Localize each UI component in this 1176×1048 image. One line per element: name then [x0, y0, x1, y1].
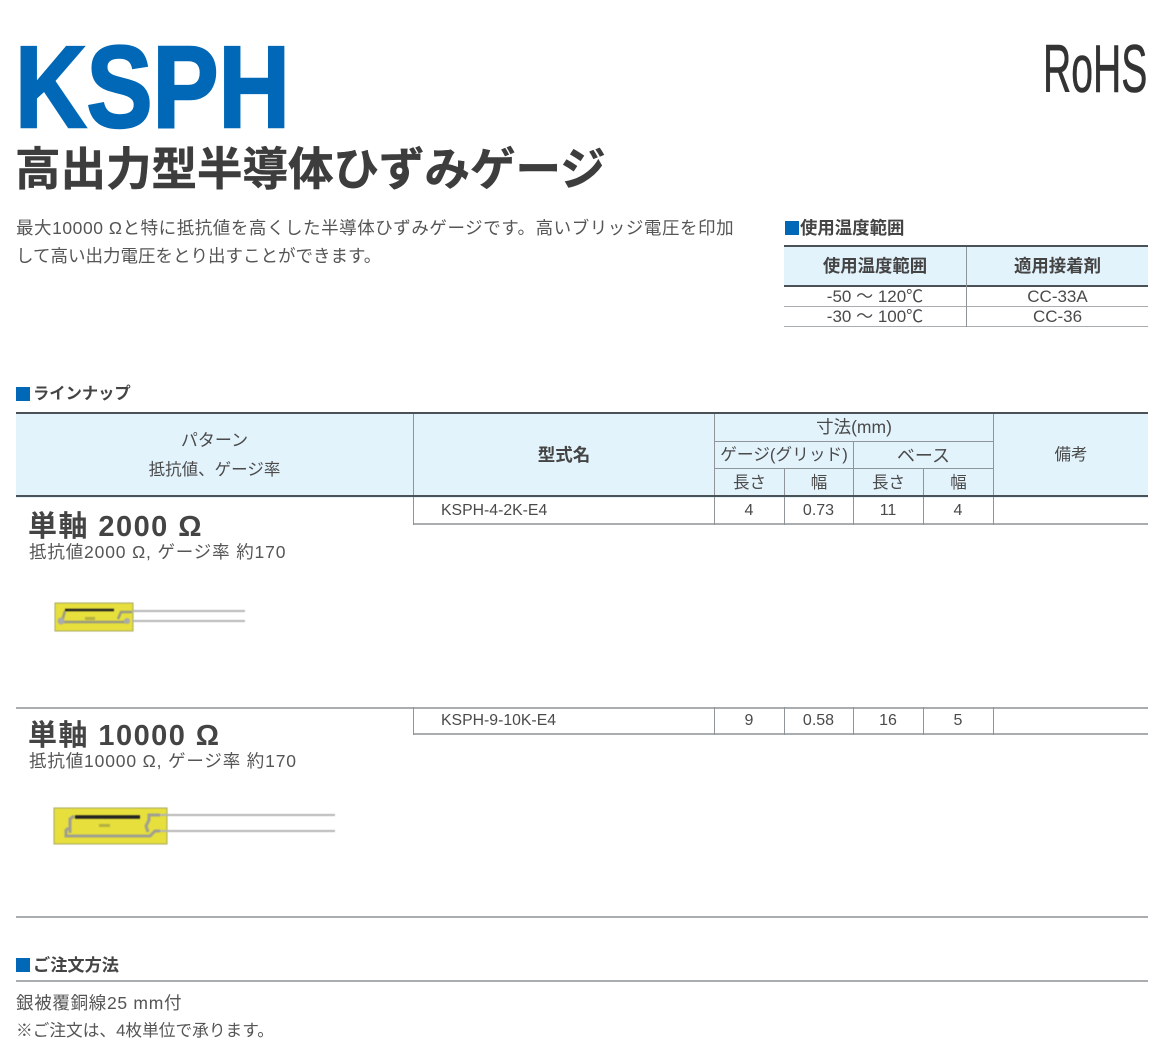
gauge grid heading: ゲージ(グリッド) — [720, 445, 848, 464]
gauge illustration: 10000 ohm — [52, 806, 336, 846]
model name: KSPH-4-2K-E4 — [441, 502, 547, 519]
base width: 4 — [954, 502, 962, 519]
grid width: 0.58 — [803, 712, 834, 729]
row 1 adhesive: CC-33A — [1027, 287, 1088, 306]
adhesive column heading: 適用接着剤 — [1014, 256, 1101, 276]
RoHS mark: RoHS — [1043, 31, 1147, 107]
intro text — [16, 218, 734, 266]
intro text: 最大10000 Ωと特に抵抗値を高くした半導体ひずみゲージです。高いブリッジ電圧を印加 — [16, 218, 734, 238]
divider — [16, 980, 1148, 982]
title: KSPH: KSPH — [15, 22, 290, 152]
heading: uniaxial 2000 ohm: 単軸 2000 Ω — [28, 511, 203, 543]
length heading 2: 長さ — [872, 474, 905, 492]
pattern heading: パターン — [181, 431, 248, 450]
resistance and gauge factor heading: 抵抗値、ゲージ率 — [149, 461, 280, 479]
spec: 10000 ohm: 抵抗値10000 Ω, ゲージ率 約170 — [29, 751, 297, 771]
divider — [16, 916, 1148, 918]
row: KSPH-9-10K-E4 — [413, 707, 1148, 735]
temperature column heading: 使用温度範囲 — [823, 256, 927, 276]
base width: 5 — [954, 712, 962, 729]
ordering note 1: 銀被覆銅線25 mm付 — [16, 993, 182, 1013]
heading: ordering: ご注文方法 — [33, 955, 119, 975]
heading: lineup: ラインナップ — [33, 385, 131, 403]
base length: 11 — [880, 502, 896, 519]
model name heading: 型式名 — [538, 445, 590, 465]
base length: 16 — [879, 712, 897, 729]
remarks heading: 備考 — [1054, 446, 1088, 464]
lineup table header — [16, 412, 1148, 498]
heading: uniaxial 10000 ohm: 単軸 10000 Ω — [28, 720, 221, 752]
row 2 temperature: -30 ～ 100℃ — [827, 307, 923, 326]
gauge illustration: 2000 ohm — [54, 602, 246, 632]
base heading: ベース — [897, 446, 950, 466]
table: operating temperature — [784, 245, 1148, 327]
grid width: 0.73 — [803, 502, 834, 519]
width heading 1: 幅 — [811, 474, 827, 492]
spec: 2000 ohm: 抵抗値2000 Ω, ゲージ率 約170 — [29, 542, 286, 562]
temperature table header band — [784, 247, 1148, 287]
model name: KSPH-9-10K-E4 — [441, 712, 556, 729]
dimensions heading: 寸法(mm) — [816, 417, 892, 437]
row 1 temperature: -50 ～ 120℃ — [827, 287, 923, 306]
width heading 2: 幅 — [950, 474, 967, 492]
ordering note 2: ※ご注文は、4枚単位で承ります。 — [16, 1021, 274, 1040]
grid length: 4 — [745, 502, 753, 519]
row: KSPH-4-2K-E4 — [413, 497, 1148, 525]
length heading 1: 長さ — [733, 474, 766, 492]
divider — [16, 707, 413, 709]
intro text: して高い出力電圧をとり出すことができます。 — [16, 246, 381, 266]
heading: operating temperature range: 使用温度範囲 — [800, 218, 904, 238]
grid length: 9 — [745, 712, 753, 729]
row 2 adhesive: CC-36 — [1033, 307, 1082, 326]
subtitle: 高出力型半導体ひずみゲージ — [15, 144, 606, 195]
